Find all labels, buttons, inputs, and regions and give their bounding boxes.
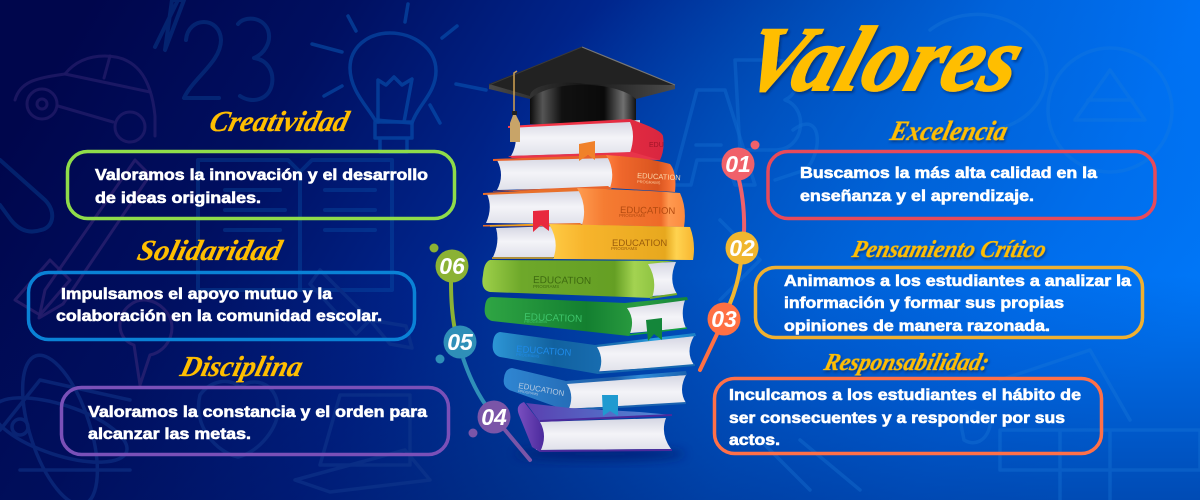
book: yellow: EDUCATION <box>612 238 667 249</box>
card <box>714 378 1102 454</box>
book: orange: EDUCATION <box>620 205 676 217</box>
book: blue: PROGRAMS <box>518 389 539 397</box>
marker 06 <box>430 244 468 282</box>
book: orange: PROGRAMS <box>619 213 645 218</box>
book: dark green <box>485 297 688 336</box>
card: colaboración en la comunidad escolar. <box>56 308 382 325</box>
connector 03 tail <box>700 334 717 370</box>
card: opiniones de manera razonada. <box>784 318 1050 335</box>
card: ser consecuentes y a responder por sus <box>729 410 1065 427</box>
card <box>756 268 1142 338</box>
book: yellow <box>490 224 694 260</box>
book: blue: EDUCATION <box>518 381 565 398</box>
panel: Disciplina <box>62 351 448 454</box>
heading: Pensamiento Crítico <box>849 235 1049 263</box>
book: red-orange <box>493 155 681 192</box>
timeline: values 04 to 06 <box>430 244 530 460</box>
book: light blue: EDUCATION <box>516 344 572 359</box>
card: información y formar sus propias <box>784 295 1064 312</box>
book stack illustration <box>482 47 696 461</box>
book: yellow: PROGRAMS <box>611 246 637 251</box>
book: light green <box>482 260 677 298</box>
panel: Excelencia <box>768 116 1155 218</box>
marker 04: 04 <box>481 404 507 430</box>
marker 03 <box>708 302 740 336</box>
tassel <box>510 71 520 142</box>
book: light blue: PROGRAMS <box>516 352 540 359</box>
panel: Pensamiento Crítico <box>756 235 1142 338</box>
card: enseñanza y el aprendizaje. <box>800 188 1034 205</box>
book: red <box>508 119 664 160</box>
book: light green: EDUCATION <box>533 275 591 287</box>
card: Animamos a los estudiantes a analizar la <box>784 273 1131 290</box>
marker 04 <box>468 400 510 438</box>
card: alcanzar las metas. <box>88 426 251 443</box>
title: Valores: Valores <box>731 9 1036 110</box>
card <box>768 152 1155 218</box>
card: Buscamos la más alta calidad en la <box>800 165 1097 182</box>
connector 02 to 03 <box>729 262 741 306</box>
book: blue <box>504 368 687 411</box>
book: red-orange: EDUCATION <box>637 171 681 182</box>
marker 05: 05 <box>447 329 474 355</box>
card: Inculcamos a los estudiantes el hábito de <box>729 387 1081 404</box>
book: light blue <box>493 332 696 374</box>
card: Impulsamos el apoyo mutuo y la <box>61 286 332 303</box>
heading: Excelencia <box>886 116 1011 147</box>
timeline: values 01 to 03 <box>700 140 760 370</box>
marker 02: 02 <box>729 235 755 261</box>
book: purple <box>518 402 672 452</box>
card <box>62 388 448 454</box>
bookmark: blue <box>602 395 618 416</box>
panel: Creatividad <box>68 106 454 218</box>
marker 05 <box>436 326 476 364</box>
connector 06 to 05 <box>451 282 455 330</box>
marker 02 <box>726 232 758 264</box>
panel: Responsabilidad <box>714 348 1102 454</box>
book: dark green: PROGRAMS <box>524 319 548 324</box>
card: Valoramos la innovación y el desarrollo <box>95 167 428 184</box>
book: dark green: EDUCATION <box>524 312 582 325</box>
bookmark: red <box>533 210 549 232</box>
card: Valoramos la constancia y el orden para <box>88 404 427 421</box>
book: red-orange: PROGRAMS <box>637 179 661 185</box>
book: orange <box>483 188 685 227</box>
shadow under the stack <box>515 447 685 461</box>
card <box>28 272 414 340</box>
card: de ideas originales. <box>95 190 261 207</box>
panel: Solidaridad <box>28 235 414 340</box>
bookmark: green <box>646 318 662 341</box>
marker 06: 06 <box>439 253 465 279</box>
book: light green: PROGRAMS <box>533 284 559 289</box>
connector 04 tail <box>505 430 530 460</box>
heading: Responsabilidad: <box>821 348 992 376</box>
book: red: EDU <box>649 142 664 149</box>
connector 05 to 04 <box>463 358 485 404</box>
card <box>68 152 454 218</box>
card: actos. <box>729 432 780 449</box>
heading: Disciplina <box>176 351 306 383</box>
marker 01: 01 <box>725 151 751 177</box>
bookmark: orange <box>579 141 595 161</box>
graduation cap <box>489 47 675 125</box>
heading: Creatividad <box>206 106 353 138</box>
connector 01 to 02 <box>739 180 744 234</box>
heading: Solidaridad <box>134 235 286 267</box>
marker 01 <box>722 140 760 180</box>
marker 03: 03 <box>711 306 737 332</box>
